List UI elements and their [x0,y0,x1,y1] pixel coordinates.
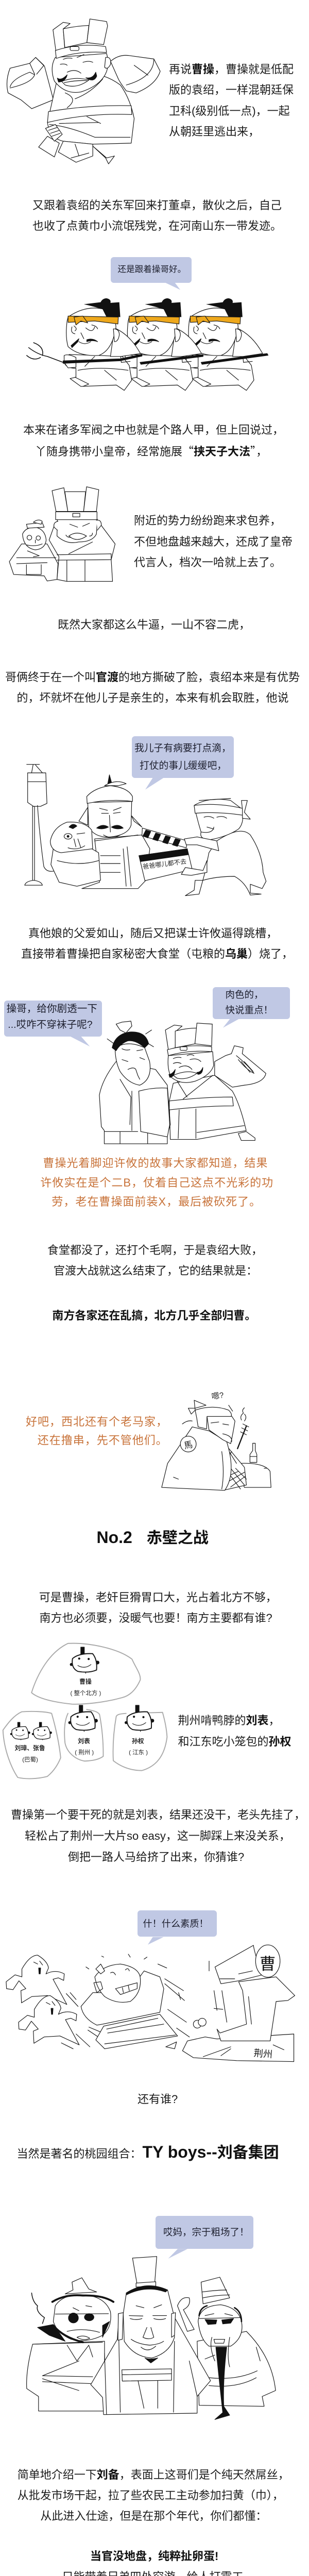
territory: Liu Zhang and Zhang Lu: 刘璋、张鲁 [15,1744,45,1751]
text: Liu Biao and Sun Quan: 和江东吃小笼包的孙权 [178,1735,291,1748]
clapperboard: 爸爸哪儿都不去 [142,858,187,871]
text: the canteen [47,1244,263,1277]
illustration: Cao Cao and the little emperor [9,486,115,582]
director [181,799,266,896]
text: Liu Biao and Sun Quan [178,1714,291,1748]
text: Jingzhou falls [11,1808,305,1863]
diagram: warlord territory blobs [2,1642,168,1780]
text: hanging on to power [134,514,293,569]
text: Liu Biao and Sun Quan: 荆州啃鸭脖的刘表， [178,1714,280,1727]
clapperboard [139,828,192,881]
territory: Sun Quan: 孙权 [132,1737,144,1744]
text: Cao Cao intro: 卫科(级别低一点)，一起 [169,105,290,117]
text: TY boys: 当然是著名的桃园组合：TY boys--刘备集团 [16,2143,279,2161]
Guan Yu [177,2277,276,2419]
speech bubble: Xu You: ...哎咋不穿袜子呢? [8,1019,93,1030]
text: Cao Cao's appetite: 可是曹操，老奸巨猾胃口大，光占着北方不够， [39,1591,277,1604]
Cao Cao [49,486,115,581]
text: result of Guandu: 南方各家还在乱搞，北方几乎全部归曹。 [52,1309,256,1322]
territory: Cao Cao, the north [31,1643,140,1704]
cloud of dust and shard [165,2019,206,2049]
speech bubble: Liu Bei [156,2216,253,2249]
ground labeled Jingzhou [182,2034,294,2062]
right sleeve [110,55,160,93]
territory: Sun Quan: ( 江东 ) [129,1749,148,1755]
text: Xu You note: 曹操光着脚迎许攸的故事大家都知道，结果 [43,1157,268,1170]
soldier: middle [125,298,203,391]
speech bubble: Yuan Shao [132,736,234,778]
Cao Cao [165,1023,266,1140]
left sleeve [7,57,53,108]
robe [47,76,134,144]
kicking leg with Cao badge [209,1945,295,2041]
text: the canteen: 食堂都没了，还打个毛啊，于是袁绍大败， [47,1244,263,1257]
text: officials without land: 当官没地盘，纯粹扯卵蛋! [90,2549,218,2563]
territory: Liu Zhang and Zhang Lu: (巴蜀) [22,1756,38,1763]
speech bubble: soldiers [111,257,192,283]
text: two tigers: 既然大家都这么牛逼，一山不容二虎， [58,618,250,631]
Liu Bei [91,2257,211,2415]
text: Cao Cao intro: 从朝廷里逃出来， [169,125,260,138]
illustration: Yuan Shao, sick son and director [24,764,267,896]
text: Guandong army: 也收了点黄巾小流氓残党，在河南山东一带发迹。 [32,219,282,232]
text: Cao Cao's appetite [39,1591,277,1624]
text: hanging on to power: 附近的势力纷纷跑来求包养， [134,514,281,527]
text: Xu You note [40,1157,273,1208]
illustration: Cao Cao with raised sleeve [6,19,161,164]
Yuan Shao [79,775,150,889]
text: Xu You note: 劳，老在曹操面前装X，最后被砍死了。 [52,1195,261,1208]
speech bubble: Cao Cao: 快说重点！ [226,1005,273,1015]
text: Xu You note: 许攸实在是个二B，仗着自己这点不光彩的功 [40,1176,273,1189]
text: Jingzhou falls: 曹操第一个要干死的就是刘表，结果还没干，老头先挂了， [11,1808,305,1821]
speech bubble: Cao Cao [212,987,289,1019]
ghost 2 [19,1996,79,2045]
territory: Liu Biao [64,1705,103,1761]
text: Liu Bei background: 从此进入仕途，但是在那个年代，你们都懂： [40,2510,267,2522]
speech bubble: Liu Bei: 哎妈，宗于粗场了！ [163,2227,249,2238]
territory: Cao Cao, the north: ( 整个北方 ) [70,1689,101,1697]
text: warlord passage: 本来在诸多军阀之中也就是个路人甲，但上回说过， [23,423,284,436]
text: Cao Cao's appetite: 南方也必须要，没暖气也要！南方主要都有谁? [39,1612,272,1624]
illustration: three yellow-turban soldiers [26,298,269,391]
territory: Liu Biao: ( 荆州 ) [75,1749,94,1755]
text: Guandong army [32,199,282,232]
text: Guandu: 的，坏就坏在他儿子是亲生的，本来有机会取胜，他说 [16,691,289,704]
text: Ma family note: 好吧，西北还有个老马家， [26,1415,168,1428]
text: Guandu: 哥俩终于在一个叫官渡的地方撕破了脸，袁绍本来是有优势 [5,671,300,684]
cape: 馬 [183,1439,194,1451]
speech bubble: Xu You [4,1001,102,1037]
head [52,53,111,92]
text: father's love [21,927,293,960]
speech bubble: soldiers: 还是跟着操哥好。 [117,264,186,274]
head [182,1400,235,1444]
text: Jingzhou falls: 轻松占了荆州一大片so easy，这一脚踩上来没关系， [25,1829,290,1842]
soldier: right [186,298,268,391]
text: Guandong army: 又跟着袁绍的关东军回来打董卓，散伙之后，自己 [32,199,282,212]
illustration: Ma Teng grilling skewers [161,1391,271,1491]
hat [53,19,108,58]
text: Ma family note: 还在撸串，先不管他们。 [38,1434,168,1447]
text: who else: 还有谁? [138,2093,178,2105]
ghost followers [6,1955,66,2005]
text: hanging on to power: 不但地盘越来越大，还成了皇帝 [134,535,293,548]
text: warlord passage: 丫随身携带小皇帝，经常施展“挟天子大法”， [35,443,267,459]
text: hanging on to power: 代言人，档次一哈就上去了。 [134,556,281,569]
text: Liu Bei background [18,2468,289,2522]
armour and skewer [225,1408,249,1490]
hanging belt and skirt [39,124,114,164]
illustration: kicked out of Jingzhou [6,1944,296,2062]
territory: Cao Cao, the north: 曹操 [79,1677,92,1685]
speech bubble: Xu You: 操哥，给你剧透一下 [7,1003,97,1014]
soldier: left with pitchfork [27,298,142,391]
speech bubble: what manners [138,1910,217,1937]
Zhang Fei [26,2278,113,2411]
territory: Liu Biao: 刘表 [78,1737,90,1744]
ground labeled Jingzhou: 荆州 [253,2047,273,2060]
IV drip stand [25,765,59,886]
text: Cao Cao intro [169,63,294,138]
text: Ma family note [26,1415,168,1447]
speech bubble: Yuan Shao: 打仗的事儿缓缓吧， [140,760,227,771]
kicking leg with Cao badge: 曹 [260,1955,276,1973]
little emperor [9,520,58,581]
Xu You [99,1021,170,1144]
territory: Sun Quan [113,1705,167,1770]
text: Cao Cao intro: 版的袁绍，一样混朝廷保 [169,83,294,96]
speech bubble: Yuan Shao: 我儿子有病要打点滴， [134,742,231,753]
heading: No.2 Battle of Red Cliffs: No.2 赤壁之战 [97,1528,209,1547]
speech bubble: Cao Cao: 肉色的， [226,989,264,1000]
text: Jingzhou falls: 倒把一路人马给挤了出来，你猜谁? [68,1851,244,1863]
speech bubble: what manners: 什！什么素质！ [143,1919,209,1929]
speed lines [61,1954,189,2049]
cape [162,1427,231,1490]
running Liu Bei [81,1964,177,2049]
text: Cao Cao intro: 再说曹操，曹操就是低配 [169,63,294,76]
illustration: Xu You and barefoot Cao Cao [99,1021,266,1144]
text: the canteen: 官渡大战就这么结束了，它的结果就是： [54,1264,258,1277]
handwritten sound: 嗯? [211,1391,225,1401]
table and bottle [239,1443,271,1487]
text: warlord passage [23,423,284,459]
illustration: three brothers in sunglasses [26,2256,276,2420]
text: Guandu [5,671,300,704]
territory: Liu Zhang and Zhang Lu [3,1711,61,1778]
text: father's love: 真他娘的父爱如山，随后又把谋士许攸逼得跳槽， [28,927,278,940]
text: officials without land [62,2549,255,2576]
text: father's love: 直接带着曹操把自家秘密大食堂（屯粮的乌巢）烧了， [21,947,293,960]
text: Liu Bei background: 简单地介绍一下刘备，表面上这哥们是个纯天然屌丝， [18,2468,289,2481]
sick son [50,822,100,886]
text: Liu Bei background: 从批发市场干起，拉了些农民工主动参加扫黄（巾）， [18,2489,284,2502]
